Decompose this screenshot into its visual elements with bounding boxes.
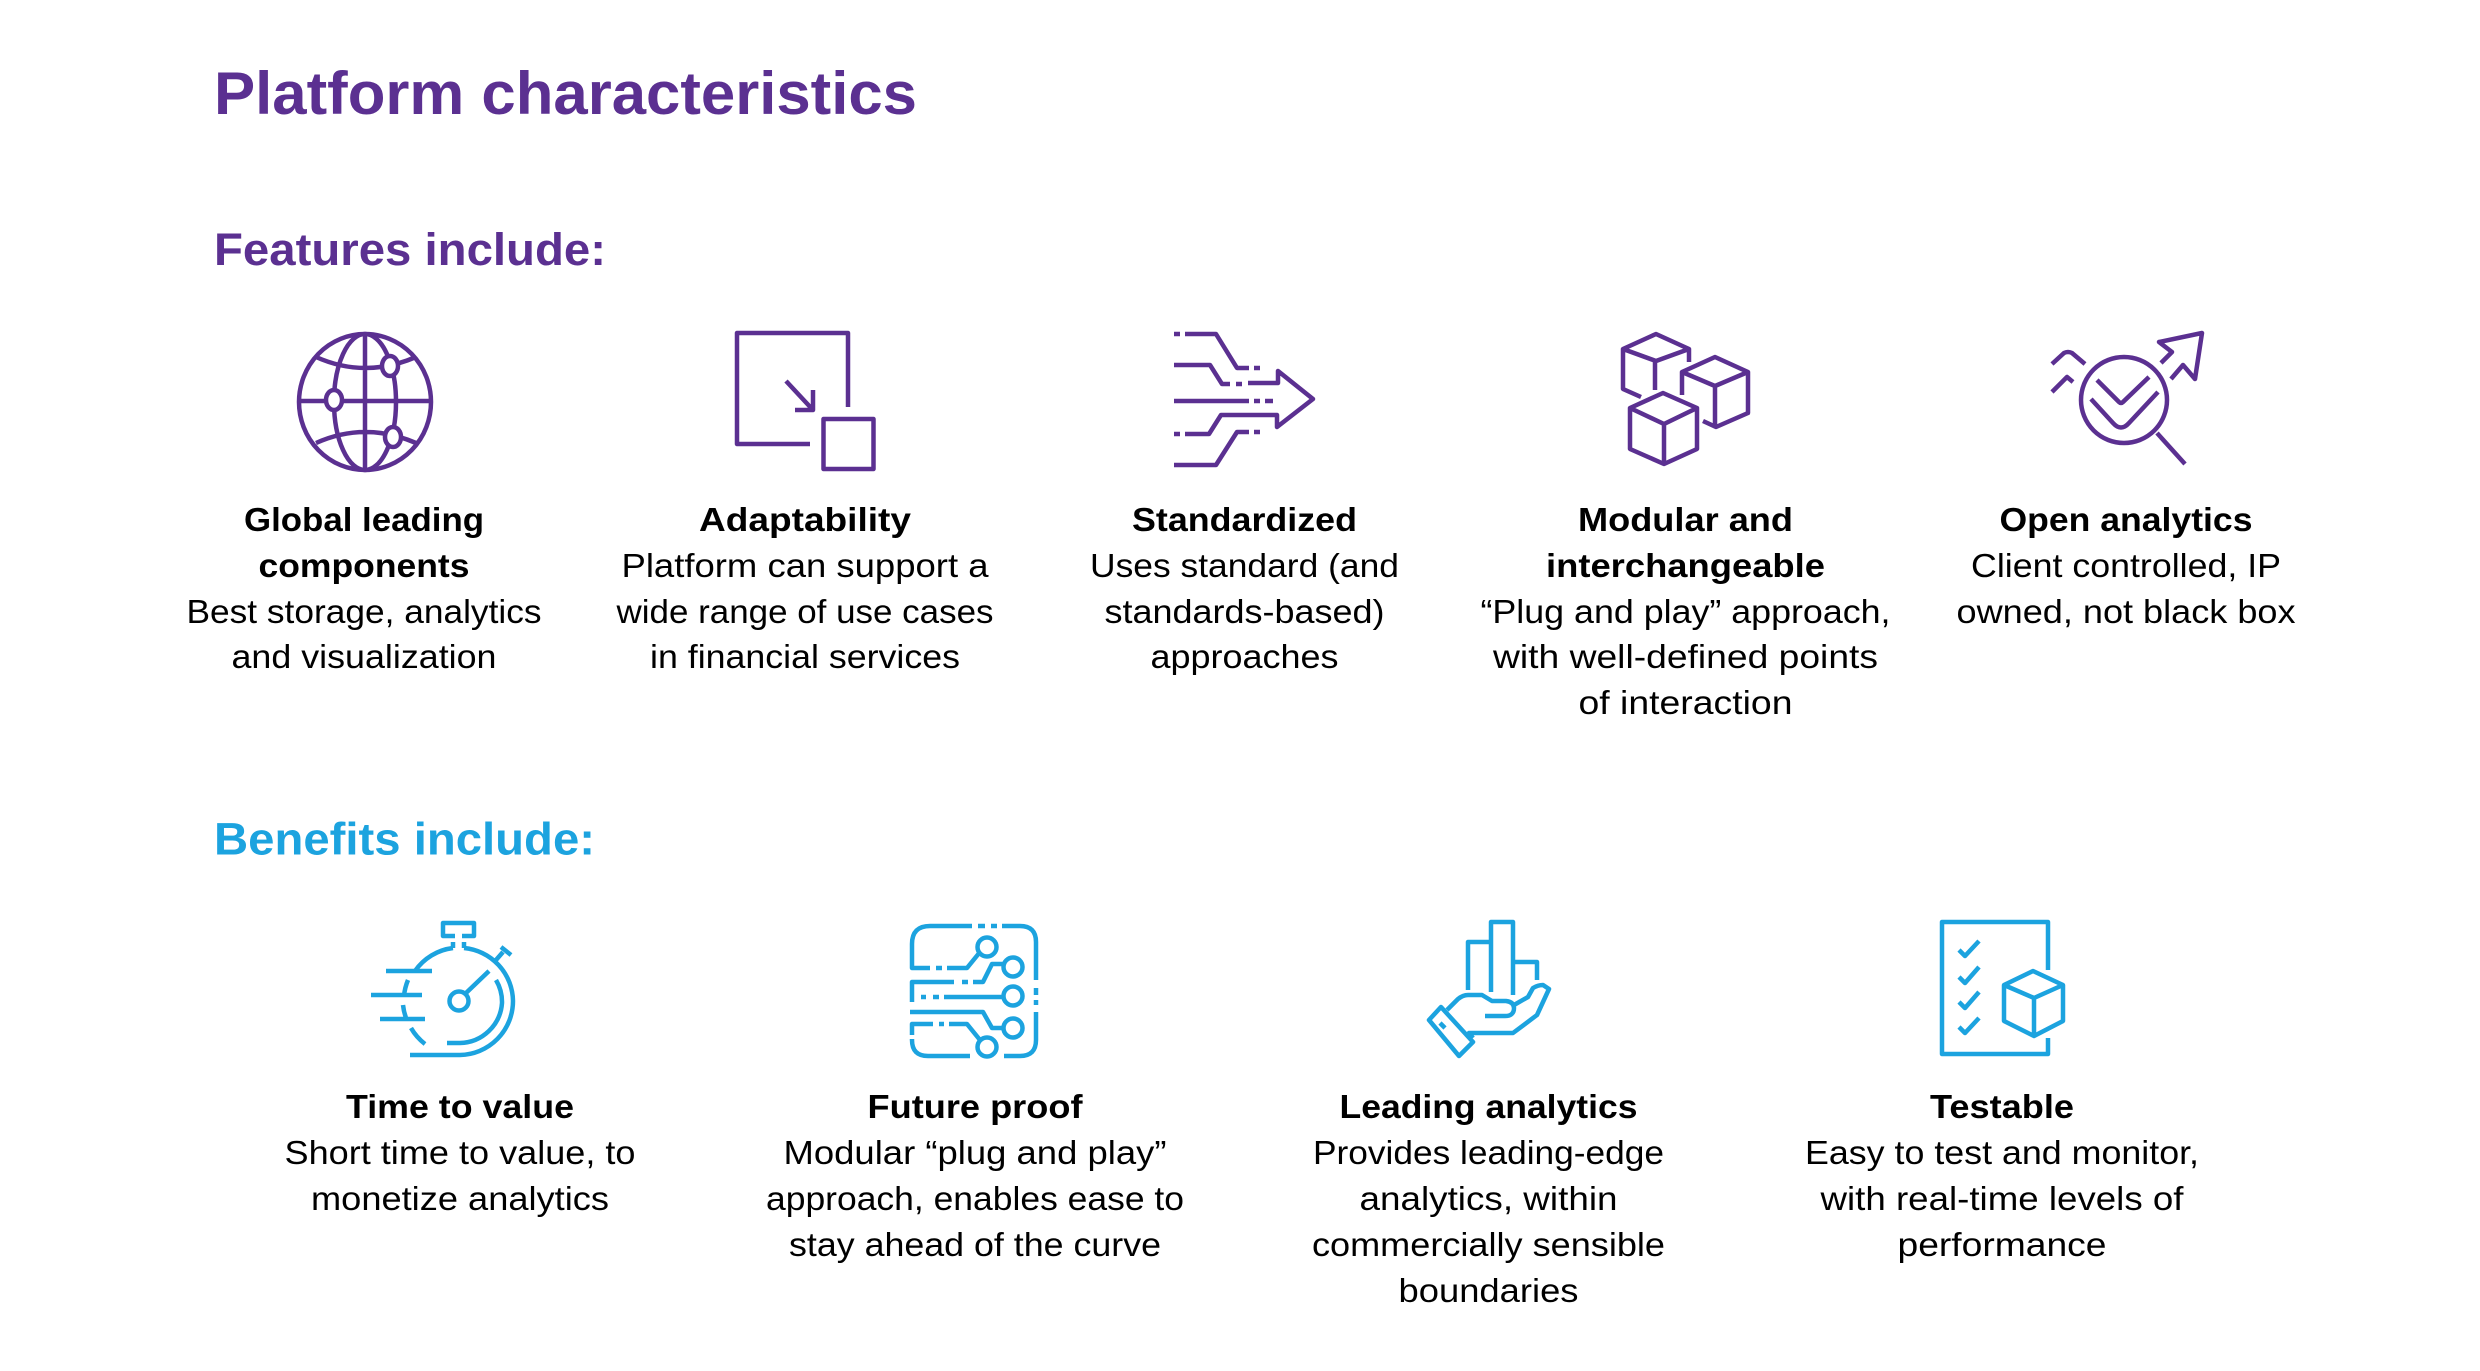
text: standardized: Uses standard (and <box>1090 547 1399 584</box>
panel: global leading components <box>186 334 542 675</box>
text: open analytics <box>1956 501 2296 630</box>
text: open analytics: Open analytics <box>2000 501 2252 538</box>
panel: leading analytics <box>1312 922 1665 1309</box>
text: testable: performance <box>1898 1226 2106 1263</box>
heading: benefits: Benefits include: <box>214 814 595 864</box>
text: global leading components: Global leading <box>244 501 484 538</box>
text: future proof: stay ahead of the curve <box>789 1226 1161 1263</box>
panel: adaptability <box>615 333 994 675</box>
text: leading analytics: analytics, within <box>1360 1180 1618 1217</box>
text: standardized: standards-based) <box>1104 593 1384 630</box>
text: time to value: Time to value <box>346 1088 574 1125</box>
text: open analytics: owned, not black box <box>1956 593 2296 630</box>
panel: future proof <box>766 926 1184 1263</box>
text: modular and interchangeable: with well-defined points <box>1492 638 1878 675</box>
text: testable: with real-time levels of <box>1819 1180 2184 1217</box>
text: standardized: Standardized <box>1132 501 1357 538</box>
icon: globe <box>299 334 431 470</box>
text: testable: Testable <box>1930 1088 2074 1125</box>
text: modular and interchangeable <box>1480 501 1890 721</box>
panel: open analytics <box>1956 333 2296 630</box>
text: standardized <box>1090 501 1399 675</box>
text: adaptability: in financial services <box>650 638 960 675</box>
text: future proof <box>766 1088 1184 1263</box>
text: adaptability: Adaptability <box>699 501 912 538</box>
panel: testable <box>1805 922 2199 1263</box>
text: testable <box>1805 1088 2199 1263</box>
text: leading analytics: Leading analytics <box>1340 1088 1638 1125</box>
text: time to value: monetize analytics <box>311 1180 609 1217</box>
text: modular and interchangeable: interchangeable <box>1546 547 1825 584</box>
text: leading analytics: Provides leading-edge <box>1313 1134 1664 1171</box>
text: global leading components <box>186 501 542 675</box>
text: time to value: Short time to value, to <box>284 1134 636 1171</box>
icon: circuit <box>910 926 1036 1056</box>
text: adaptability: wide range of use cases <box>615 593 994 630</box>
panel: modular and interchangeable <box>1480 334 1890 721</box>
text: modular and interchangeable: of interaction <box>1578 684 1792 721</box>
text: testable: Easy to test and monitor, <box>1805 1134 2199 1171</box>
heading: features: Features include: <box>214 224 606 275</box>
icon: hand holding bar chart <box>1429 922 1549 1056</box>
icon: cubes <box>1623 334 1748 464</box>
text: future proof: Modular “plug and play” <box>784 1134 1166 1171</box>
text: modular and interchangeable: “Plug and play” approach, <box>1480 593 1890 630</box>
icon: merging arrow <box>1174 334 1313 465</box>
title: Platform characteristics <box>214 60 917 127</box>
text: open analytics: Client controlled, IP <box>1971 547 2281 584</box>
text: future proof: approach, enables ease to <box>766 1180 1184 1217</box>
panel: time to value <box>284 923 636 1217</box>
text: time to value <box>284 1088 636 1217</box>
text: leading analytics: boundaries <box>1398 1272 1578 1309</box>
text: future proof: Future proof <box>868 1088 1084 1125</box>
text: leading analytics: commercially sensible <box>1312 1226 1665 1263</box>
icon: resize windows <box>737 333 874 469</box>
text: adaptability <box>615 501 994 675</box>
text: global leading components: components <box>258 547 470 584</box>
text: modular and interchangeable: Modular and <box>1578 501 1793 538</box>
text: leading analytics <box>1312 1088 1665 1309</box>
icon: checklist with cube <box>1942 922 2063 1054</box>
text: standardized: approaches <box>1150 638 1338 675</box>
text: global leading components: Best storage, analytics <box>186 593 542 630</box>
panel: standardized <box>1090 334 1399 675</box>
icon: magnifier with chevrons and arrow <box>2052 333 2202 464</box>
text: adaptability: Platform can support a <box>622 547 989 584</box>
icon: stopwatch <box>371 923 513 1055</box>
text: global leading components: and visualization <box>232 638 496 675</box>
